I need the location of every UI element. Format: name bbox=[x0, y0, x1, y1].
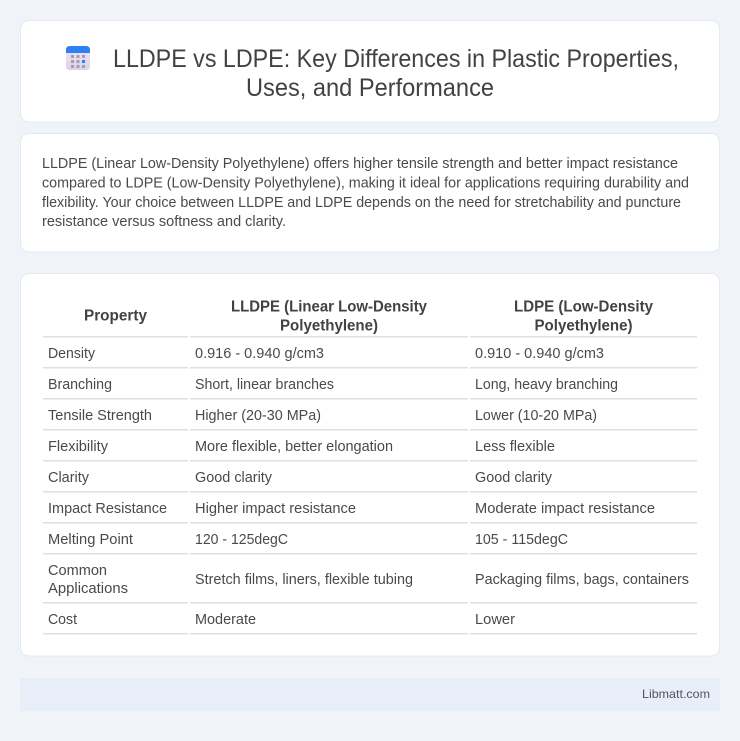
row: branching: Short, linear branches bbox=[195, 377, 334, 393]
icon: calendar bbox=[66, 46, 90, 70]
table header row: Polyethylene) bbox=[280, 318, 378, 334]
panel: comparison table bbox=[20, 274, 720, 656]
table header row: Property bbox=[84, 308, 147, 324]
row: melting point: Melting Point bbox=[48, 532, 133, 548]
row: branching bbox=[48, 377, 618, 393]
row: common applications bbox=[48, 563, 689, 597]
panel: introduction text: resistance versus softness and clarity. bbox=[42, 214, 286, 230]
row: flexibility: Less flexible bbox=[475, 439, 555, 455]
row: tensile strength: Tensile Strength bbox=[48, 408, 152, 424]
row: melting point: 105 - 115degC bbox=[475, 532, 568, 548]
table header row: Polyethylene) bbox=[534, 318, 632, 334]
row: common applications: Packaging films, bags, containers bbox=[475, 572, 689, 588]
table header row: LLDPE (Linear Low-Density bbox=[231, 298, 427, 316]
row: common applications: Stretch films, liners, flexible tubing bbox=[195, 572, 413, 588]
row: tensile strength: Lower (10-20 MPa) bbox=[475, 408, 597, 424]
footer bar bbox=[20, 678, 720, 711]
panel: title header bbox=[20, 20, 720, 122]
row: density: 0.910 - 0.940 g/cm3 bbox=[475, 346, 604, 362]
row: branching: Long, heavy branching bbox=[475, 377, 618, 393]
panel: introduction text: flexibility. Your choice between LLDPE and LDPE depends on the need for stretchability and puncture bbox=[42, 195, 681, 211]
row: cost: Lower bbox=[475, 612, 515, 628]
row: clarity: Clarity bbox=[48, 470, 90, 486]
row: melting point bbox=[48, 532, 568, 548]
row: tensile strength bbox=[48, 408, 597, 424]
row: clarity: Good clarity bbox=[195, 470, 273, 486]
row: cost: Cost bbox=[48, 612, 77, 628]
row: clarity bbox=[48, 470, 553, 486]
row: impact resistance bbox=[48, 501, 655, 517]
row: density: Density bbox=[48, 346, 96, 362]
row: density bbox=[48, 346, 604, 362]
row: clarity: Good clarity bbox=[475, 470, 553, 486]
panel: introduction text: LLDPE (Linear Low-Density Polyethylene) offers higher tensile strength and better impact resistance bbox=[42, 156, 678, 172]
row: flexibility: Flexibility bbox=[48, 439, 109, 455]
row: branching: Branching bbox=[48, 377, 112, 393]
row: cost: Moderate bbox=[195, 612, 256, 628]
title: Uses, and Performance bbox=[246, 74, 494, 102]
row: melting point: 120 - 125degC bbox=[195, 532, 288, 548]
row: impact resistance: Higher impact resistance bbox=[195, 501, 356, 517]
row: flexibility: More flexible, better elongation bbox=[195, 439, 393, 455]
footer bar: Libmatt.com bbox=[642, 687, 710, 701]
row: common applications: Common bbox=[48, 563, 107, 579]
panel: introduction text bbox=[20, 134, 720, 252]
table header row bbox=[84, 298, 653, 334]
panel: introduction text: compared to LDPE (Low-Density Polyethylene), making it ideal for applications requiring durability and bbox=[42, 176, 689, 192]
row: cost bbox=[48, 612, 515, 628]
row: impact resistance: Moderate impact resistance bbox=[475, 501, 655, 517]
row: impact resistance: Impact Resistance bbox=[48, 501, 167, 517]
table header row: LDPE (Low-Density bbox=[514, 298, 653, 316]
title bbox=[113, 45, 679, 102]
row: density: 0.916 - 0.940 g/cm3 bbox=[195, 346, 324, 362]
row: flexibility bbox=[48, 439, 555, 455]
row: common applications: Applications bbox=[48, 581, 128, 597]
row: tensile strength: Higher (20-30 MPa) bbox=[195, 408, 321, 424]
title: LLDPE vs LDPE: Key Differences in Plastic Properties, bbox=[113, 45, 679, 73]
